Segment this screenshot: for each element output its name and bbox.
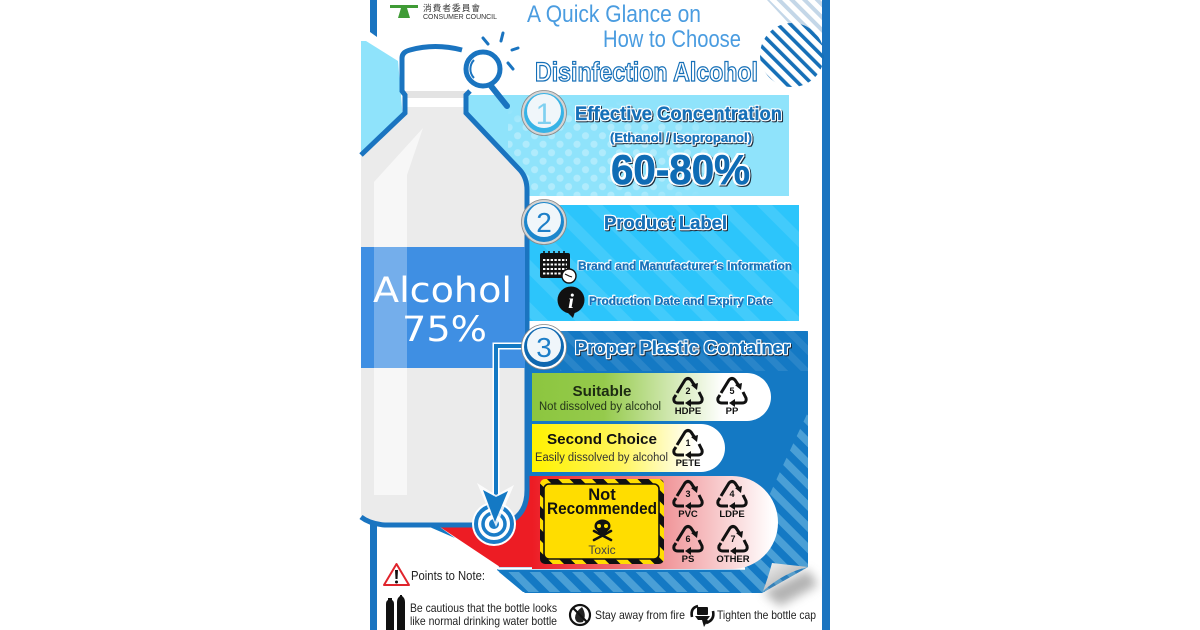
label text: Alcohol: Alcohol: [373, 271, 512, 311]
poster background: [361, 0, 831, 630]
bottle illustration: [361, 46, 527, 525]
bottle body: [361, 107, 527, 525]
tier: not recommended: [532, 476, 778, 569]
hazard border: [540, 479, 664, 564]
sign face: [544, 484, 659, 559]
panel 2: product label: [527, 205, 799, 321]
alcohol label band: [361, 247, 525, 368]
step badge 2: [522, 200, 566, 244]
icon: warning triangle: [384, 564, 409, 585]
bottle highlight: [374, 128, 423, 495]
not recommended pill: [532, 476, 778, 569]
tier: second choice: [532, 424, 725, 472]
panel 1 background: [467, 95, 789, 196]
step badge 1: 1: [536, 98, 552, 131]
step badge 3: [522, 324, 566, 370]
red wedge: [437, 476, 540, 567]
target icon: [472, 502, 516, 546]
bottle caution text: [410, 601, 557, 628]
production date text: Production Date and Expiry Date: [589, 296, 773, 308]
brand info text: Brand and Manufacturer's Information: [578, 261, 792, 273]
panel 2 stripes: [527, 205, 799, 321]
icon: magnifying glass: [466, 33, 518, 106]
label text: 75%: 75%: [402, 310, 487, 350]
second choice pill: [532, 424, 725, 472]
bottle collar: [405, 98, 466, 107]
recycling icon 4 LDPE: [718, 482, 746, 520]
bottle ring: [405, 91, 466, 98]
recycling icon 5 PP: [718, 378, 746, 417]
light blue backdrop: [361, 41, 410, 200]
second choice description: Easily dissolved by alcohol: [535, 452, 668, 464]
cap note text: Tighten the bottle cap: [717, 608, 816, 622]
logo: Consumer Council: [390, 2, 497, 21]
icon: no fire: [570, 605, 590, 625]
bottle caution text: like normal drinking water bottle: [410, 614, 557, 628]
step badge 3: 3: [536, 332, 552, 363]
recycling icon 1 PETE: PETE: [676, 458, 700, 469]
recycling icon 2 HDPE: [674, 378, 702, 417]
recycling icon 3 PVC: 3: [685, 489, 691, 499]
tier: suitable: [532, 373, 771, 421]
points to note: [384, 564, 816, 630]
toxic label: Toxic: [588, 543, 616, 557]
recycling icon 4 LDPE: 4: [729, 489, 735, 499]
hazard sign: [540, 479, 664, 564]
second choice heading: Second Choice: [547, 431, 657, 448]
recycling icon 1 PETE: [674, 430, 702, 469]
recycling icon 6 PS: [674, 526, 702, 565]
recycling icon 7 OTHER: OTHER: [716, 554, 750, 565]
points to note heading: Points to Note:: [411, 569, 485, 583]
recycling icon 7 OTHER: 7: [730, 534, 736, 544]
recycling icon 3 PVC: [674, 482, 702, 520]
left border top: [370, 0, 377, 37]
bottle caution text: Be cautious that the bottle looks: [410, 601, 557, 615]
title line 2: How to Choose: [603, 26, 741, 53]
bottle outline: [361, 46, 527, 525]
panel 3 heading: Proper Plastic Container: [575, 337, 790, 358]
icon: calendar and clock: [540, 251, 576, 283]
step badge 1: [522, 90, 566, 136]
panel 3 top stripes: [560, 331, 808, 371]
bottle cap: [402, 46, 470, 91]
left border bottom: [370, 522, 377, 630]
panel 3 bottom stripes: [499, 572, 765, 592]
recycling icon 6 PS: 6: [685, 534, 691, 544]
blue sliver at wedge tip: [425, 525, 455, 538]
step badge 2: 2: [536, 207, 552, 238]
panel 1 heading: Effective Concentration: [575, 104, 782, 125]
curl shadow: [763, 570, 818, 606]
recycling icon 5 PP: PP: [726, 406, 739, 417]
panel 3: proper plastic container: [425, 331, 808, 593]
curl flap: [763, 563, 808, 591]
panel 2 background: [527, 205, 799, 321]
sign heading line 1: Not: [588, 486, 616, 504]
recycling icon 1 PETE: 1: [685, 438, 691, 448]
fire note text: Stay away from fire: [595, 608, 685, 622]
title: [527, 1, 758, 87]
panel 2 heading: Product Label: [604, 213, 727, 233]
solvents note: (Ethanol / Isopropanol): [610, 131, 752, 145]
suitable pill: [532, 373, 771, 421]
recycling icon 4 LDPE: LDPE: [719, 509, 745, 520]
arrow from step 3 to target: [472, 346, 525, 546]
recycling icon 6 PS: PS: [682, 554, 694, 565]
arrow head: [477, 483, 514, 527]
icon: bottle cap tightening: [692, 606, 713, 627]
title line 3: Disinfection Alcohol: [535, 57, 758, 87]
suitable heading: Suitable: [572, 383, 632, 400]
sign heading line 2: Recommended: [547, 500, 657, 518]
halftone dots: [508, 104, 732, 196]
white edge along wedge: [434, 527, 745, 568]
panel 3 background: [497, 331, 808, 593]
icon: skull and crossbones: [594, 520, 611, 540]
icon: bottles: [386, 595, 405, 630]
logo emblem: [390, 5, 418, 18]
logo text English: CONSUMER COUNCIL: [423, 12, 497, 21]
panel 1: effective concentration: [467, 95, 789, 196]
suitable description: Not dissolved by alcohol: [539, 401, 661, 413]
recycling icon 5 PP: 5: [729, 386, 735, 396]
infographic poster: [359, 0, 830, 630]
logo text Chinese: 消費者委員會: [423, 2, 480, 13]
recycling icon 3 PVC: PVC: [678, 509, 698, 520]
decorative striped corner: [760, 0, 824, 87]
recycling icon 7 OTHER: [716, 526, 750, 565]
60-80% figure: 60-80%: [611, 146, 750, 193]
icon: information bubble: i: [568, 289, 574, 313]
icon: information bubble: [558, 286, 584, 318]
title line 1: A Quick Glance on: [527, 1, 701, 28]
page curl: [763, 563, 818, 606]
recycling icon 2 HDPE: HDPE: [675, 406, 701, 417]
right border: [822, 0, 830, 630]
label highlight: [374, 247, 407, 368]
recycling icon 2 HDPE: 2: [685, 386, 691, 396]
panel 3 right stripes: [740, 412, 808, 593]
